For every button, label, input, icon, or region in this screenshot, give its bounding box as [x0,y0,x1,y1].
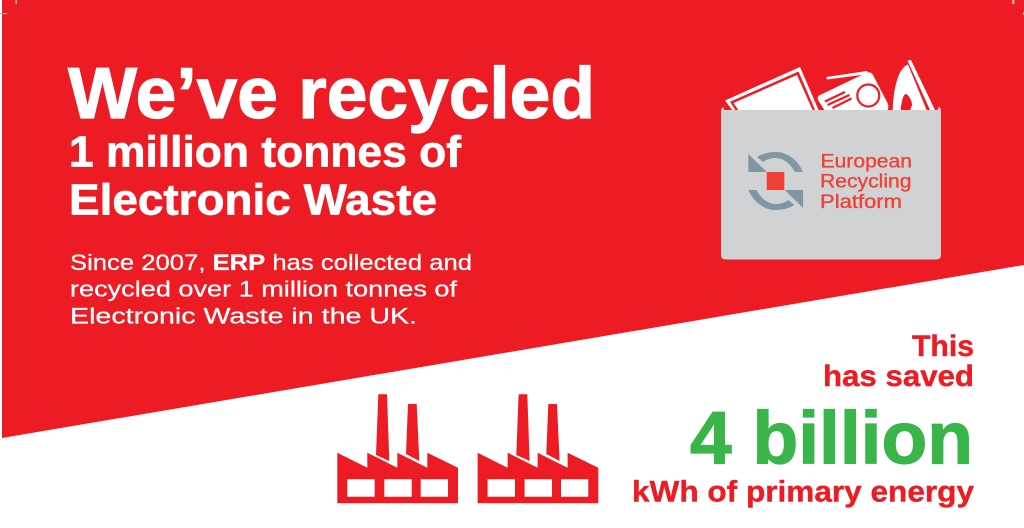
icon: factory 1 [337,394,458,503]
title: Electronic Waste [69,176,437,224]
intro text: Since 2007, ERP has collected and [70,250,472,275]
intro text [70,250,472,328]
title [68,54,595,224]
icon: radio [818,71,888,111]
logo: wordmark: European [820,152,912,172]
saved heading: has saved [823,360,974,393]
saved heading [823,330,974,393]
intro text: Electronic Waste in the UK. [70,304,417,328]
icon: tablet [725,67,819,111]
energy label: kWh of primary energy [632,476,974,509]
icon: iron [893,60,935,111]
logo: wordmark [820,152,912,213]
icon: factory 2 [478,394,598,503]
logo: recycling arrows [748,152,803,210]
bin body [721,107,941,260]
saved heading: This [912,330,974,363]
logo: wordmark: Recycling [820,172,912,192]
logo: wordmark: Platform [820,192,902,213]
big number: 4 billion [690,396,973,479]
intro text: recycled over 1 million tonnes of [70,276,458,302]
title: We’ve recycled [68,54,595,134]
title: 1 million tonnes of [69,128,461,176]
recycling bin with electronic items [721,60,941,260]
